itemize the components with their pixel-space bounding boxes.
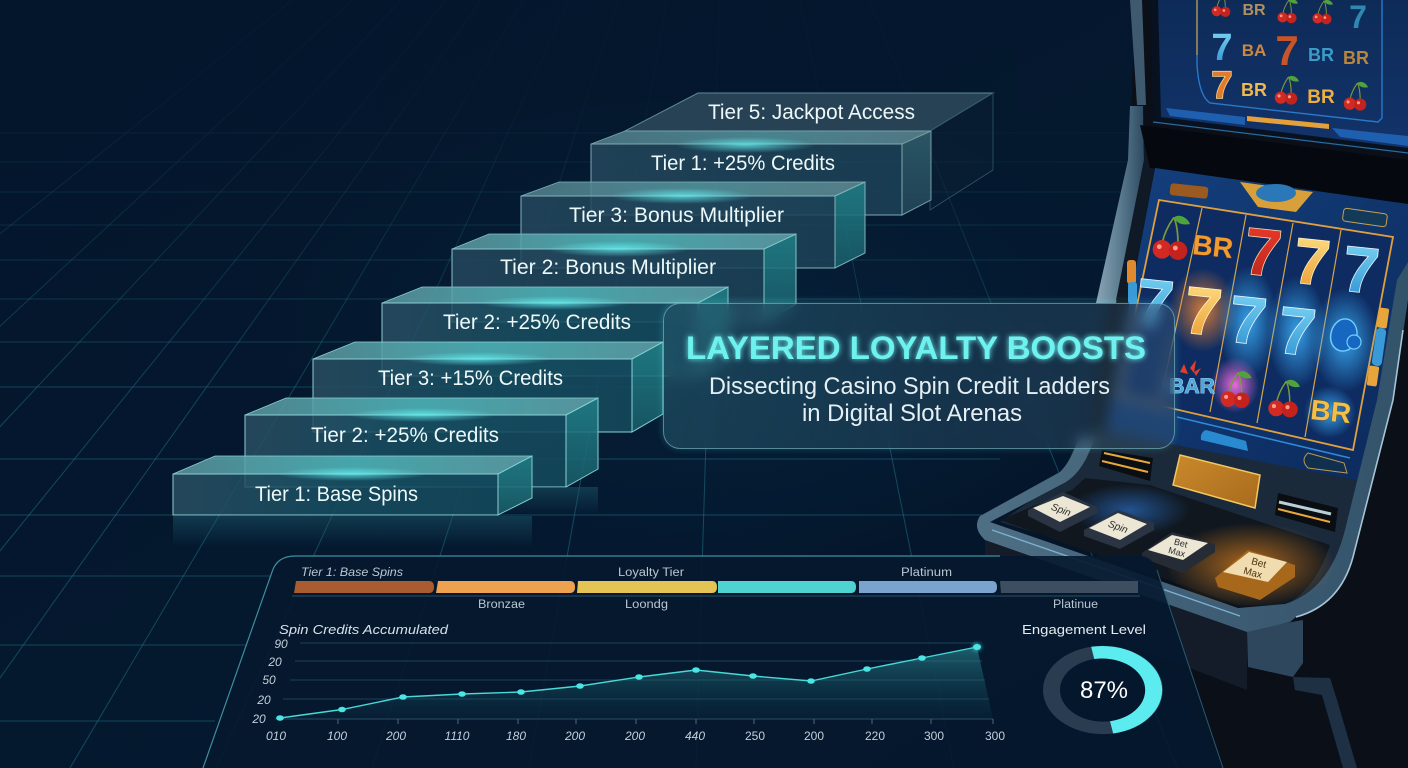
- upper screen: BR: [1242, 2, 1266, 19]
- line chart: spin credits accumulated: 180: [506, 729, 526, 743]
- button: bet max: Bet: [1173, 537, 1189, 550]
- upper screen: BR: [1308, 45, 1334, 65]
- step: Tier 2 +25% Credits upper: Tier 2: +25% Credits: [443, 311, 631, 334]
- line chart: spin credits accumulated: [251, 623, 1005, 743]
- upper screen: [1150, 0, 1408, 156]
- slot machine: [977, 0, 1408, 768]
- step: Tier 2 +25% Credits upper: [382, 287, 728, 376]
- step: Tier 1 Base Spins: Tier 1: Base Spins: [255, 483, 418, 506]
- line chart: spin credits accumulated: 200: [564, 729, 585, 743]
- line chart: spin credits accumulated: 100: [327, 729, 347, 743]
- step: Tier 2 Bonus Multiplier: Tier 2: Bonus Multiplier: [500, 256, 716, 279]
- button: bet max gold: Bet: [1250, 556, 1268, 571]
- loyalty tier bar: Loondg: [625, 599, 668, 611]
- line chart: spin credits accumulated: 200: [804, 729, 824, 743]
- loyalty tier bar: Tier 1: Base Spins: [301, 567, 403, 579]
- loyalty tier bar: Platinue: [1053, 599, 1098, 611]
- button: bet max: [1142, 532, 1215, 573]
- reel frame and symbols: 7: [1181, 272, 1225, 350]
- upper screen: BR: [1241, 80, 1267, 100]
- reel frame and symbols: 7: [1275, 292, 1319, 370]
- step: Tier 2 Bonus Multiplier: [452, 234, 796, 322]
- upper screen: BA: [1242, 41, 1266, 60]
- loyalty tier bar: Loyalty Tier: [618, 567, 684, 579]
- console: [977, 262, 1408, 768]
- main screen bezel: [1105, 125, 1408, 482]
- reel frame and symbols: BR: [1191, 229, 1235, 264]
- reel frame and symbols: 7: [1339, 232, 1382, 308]
- step: Tier 2 +25% Credits lower: Tier 2: +25% Credits: [311, 424, 499, 447]
- line chart: spin credits accumulated: 220: [865, 729, 885, 743]
- loyalty tier bar: Bronzae: [478, 599, 525, 611]
- line chart: spin credits accumulated: 250: [745, 729, 765, 743]
- reel frame and symbols: 7: [1133, 264, 1177, 342]
- title: LAYERED LOYALTY BOOSTS: [686, 330, 1146, 366]
- step: Tier 3 +15% Credits: Tier 3: +15% Credits: [378, 367, 563, 390]
- line chart: spin credits accumulated: 1110: [445, 729, 470, 743]
- line chart: spin credits accumulated: 50: [262, 673, 276, 687]
- engagement donut: 87%: [1080, 677, 1128, 704]
- loyalty tier bar: Platinum: [901, 567, 952, 579]
- subtitle line 1: Dissecting Casino Spin Credit Ladders: [709, 373, 1110, 400]
- reel frame and symbols: BR: [1309, 394, 1353, 429]
- line chart: spin credits accumulated: 440: [685, 729, 705, 743]
- step: Tier 5 Jackpot Access: Tier 5: Jackpot Access: [708, 101, 915, 124]
- dashboard panel: [203, 556, 1223, 768]
- upper screen: 7: [1211, 65, 1233, 107]
- title panel: [663, 303, 1175, 449]
- button: spin 2: [1084, 510, 1154, 549]
- reel frame and symbols: 7: [1290, 224, 1333, 300]
- subtitle line 2: in Digital Slot Arenas: [802, 400, 1022, 427]
- line chart: spin credits accumulated: 300: [924, 729, 944, 743]
- line chart: spin credits accumulated: 300: [985, 729, 1005, 743]
- button: spin 2: Spin: [1107, 519, 1130, 536]
- step: Tier 1 +25% Credits: [591, 131, 931, 215]
- reel frame and symbols: 7: [1226, 281, 1270, 359]
- button: spin 1: Spin: [1050, 502, 1073, 519]
- line chart: spin credits accumulated: 200: [385, 729, 406, 743]
- button: bet max gold: [1215, 550, 1295, 600]
- button: spin 1: [1028, 492, 1097, 532]
- step: Tier 2 +25% Credits lower: [245, 398, 598, 515]
- step: Tier 5 Jackpot Access: [625, 93, 993, 210]
- tier staircase: [173, 93, 993, 548]
- upper screen: 7: [1349, 0, 1367, 35]
- line chart: spin credits accumulated: 20: [251, 712, 266, 726]
- line chart: spin credits accumulated: 90: [274, 637, 288, 651]
- step: Tier 3 Bonus Multiplier: [521, 182, 865, 268]
- step: Tier 1 Base Spins: [173, 456, 532, 548]
- upper screen: 7: [1211, 27, 1233, 69]
- step: Tier 1 +25% Credits: Tier 1: +25% Credits: [651, 152, 835, 175]
- loyalty tier bar: [292, 567, 1140, 611]
- reel frame and symbols: BAR: [1169, 375, 1215, 398]
- line chart: spin credits accumulated: 20: [267, 655, 282, 669]
- step: Tier 3 Bonus Multiplier: Tier 3: Bonus Multiplier: [569, 204, 784, 227]
- line chart: spin credits accumulated: 010: [266, 729, 286, 743]
- screen buttons and slots: [1099, 430, 1347, 532]
- line chart: spin credits accumulated: 20: [256, 693, 271, 707]
- upper screen: 7: [1275, 27, 1299, 74]
- cabinet body: [1090, 0, 1408, 768]
- upper screen: BR: [1343, 48, 1369, 68]
- engagement donut: [1022, 623, 1154, 728]
- reel frame and symbols: 7: [1241, 213, 1285, 291]
- step: Tier 3 +15% Credits: [313, 342, 663, 432]
- reel frame and symbols: [1118, 182, 1393, 458]
- heading text: [686, 330, 1146, 427]
- line chart: spin credits accumulated: Spin Credits Accumulated: [279, 623, 449, 637]
- line chart: spin credits accumulated: 200: [624, 729, 645, 743]
- engagement donut: Engagement Level: [1022, 623, 1146, 637]
- button: bet max gold: Max: [1242, 566, 1263, 581]
- upper screen: BR: [1307, 87, 1335, 108]
- button: bet max: Max: [1167, 545, 1187, 559]
